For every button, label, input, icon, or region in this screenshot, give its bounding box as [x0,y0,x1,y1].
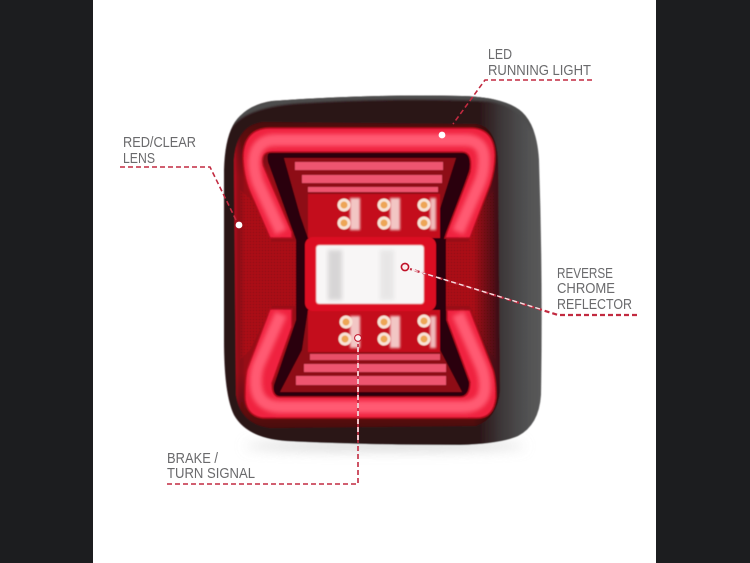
callout: LED running light: RUNNING LIGHT [488,63,591,79]
ground shadow [245,442,525,450]
callout: LED running light: LED [488,47,512,63]
reverse white lens [316,245,424,304]
tail light [224,96,542,450]
upper LED field [308,194,440,238]
housing top rim highlight [226,96,536,130]
lower light tube [245,309,496,418]
housing [224,96,542,445]
callout: reverse chrome reflector: CHROME [557,281,615,297]
callout: LED running light [439,47,592,138]
callout: red/clear lens [120,135,242,228]
upper chrome bars [295,162,443,192]
upper light tube [243,128,495,238]
lens edge shading [234,122,500,428]
right dark side bar [656,0,750,563]
right reflector panel [446,190,496,360]
callout: reverse chrome reflector: REVERSE [557,266,613,282]
lower chrome bars [296,354,446,385]
callout: red/clear lens: LENS [123,151,155,167]
callout: brake / turn signal [167,335,361,484]
callout: brake / turn signal: BRAKE / [167,451,219,467]
lower chamber [280,310,462,392]
red lens body [234,122,500,428]
central dark cavity [268,152,472,397]
left dark side bar [0,0,93,563]
upper chamber [284,158,456,238]
lower LEDs [340,316,436,348]
lower LED field [308,310,440,352]
upper LEDs [339,198,436,230]
callout: brake / turn signal: TURN SIGNAL [167,466,255,482]
callout: red/clear lens: RED/CLEAR [123,135,196,151]
callout: reverse chrome reflector [401,263,637,315]
callout: reverse chrome reflector: REFLECTOR [557,297,632,313]
left reflector panel [240,190,296,360]
center reverse lens surround [305,237,436,311]
